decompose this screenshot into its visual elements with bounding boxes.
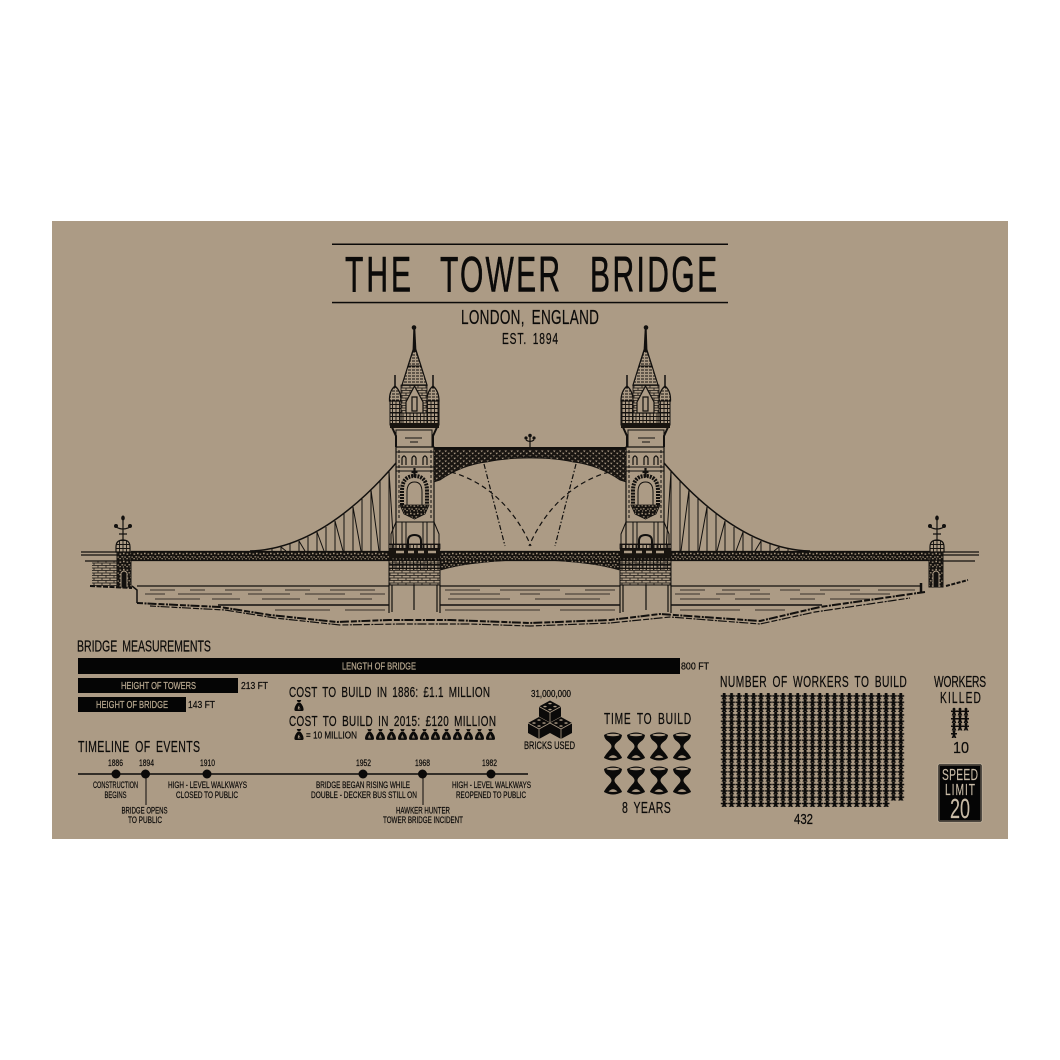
event 1968 — [383, 758, 463, 826]
bricks label: BRICKS USED — [524, 740, 575, 752]
bar: length of bridge: LENGTH OF BRIDGE — [342, 660, 416, 672]
pictogram: workers — [720, 693, 904, 807]
speed limit sign: LIMIT — [945, 781, 975, 799]
heading: WORKERS — [934, 673, 986, 691]
killed count: 10 — [953, 740, 969, 757]
event 1910: CLOSED TO PUBLIC — [176, 790, 238, 801]
workers count: 432 — [794, 811, 813, 828]
heading: NUMBER OF WORKERS TO BUILD — [720, 673, 907, 691]
panel: poster — [52, 221, 1008, 839]
title block: TOWER — [440, 247, 560, 302]
bar: length of bridge: 800 FT — [681, 660, 709, 672]
event 1952 — [311, 758, 417, 801]
title block — [332, 244, 728, 303]
icon: money bag — [294, 700, 304, 711]
speed limit sign: 20 — [950, 793, 970, 824]
speed limit sign — [938, 764, 982, 824]
legend: money bag equals 10 million: = 10 MILLION — [306, 730, 357, 742]
event 1910: HIGH - LEVEL WALKWAYS — [168, 780, 247, 791]
bar: length of bridge — [78, 658, 709, 674]
icons: twelve money bags — [365, 729, 495, 740]
event 1894: BRIDGE OPENS — [122, 806, 168, 816]
event 1968: HAWKER HUNTER — [396, 806, 450, 816]
event 1886 — [93, 758, 138, 801]
section: number of workers — [720, 673, 907, 828]
event 1894: TO PUBLIC — [128, 815, 162, 826]
section: time to build — [604, 710, 691, 817]
cost 1886: COST TO BUILD IN 1886: £1.1 MILLION — [289, 684, 490, 701]
event 1952: 1952 — [356, 758, 371, 769]
event 1910 — [168, 758, 247, 801]
title block: BRIDGE — [590, 247, 717, 302]
heading: KILLED — [940, 689, 981, 707]
bar: height of towers: HEIGHT OF TOWERS — [121, 680, 196, 692]
bar: height of towers: 213 FT — [241, 680, 268, 692]
event 1968: 1968 — [415, 758, 430, 769]
event 1982: 1982 — [482, 758, 497, 769]
speed limit sign: SPEED — [942, 766, 978, 784]
title block: THE — [345, 247, 411, 302]
brick count: 31,000,000 — [531, 689, 571, 700]
event 1894: 1894 — [139, 758, 154, 769]
heading — [934, 673, 986, 707]
event 1910: 1910 — [200, 758, 215, 769]
icons: eight hourglasses — [604, 732, 691, 794]
icon: stacked bricks — [528, 700, 572, 739]
section: bricks used — [524, 689, 575, 752]
central lamp — [524, 434, 536, 447]
event 1952: DOUBLE - DECKER BUS STILL ON — [311, 790, 417, 801]
timeline axis — [78, 770, 528, 805]
event 1982 — [452, 758, 531, 801]
right bank — [921, 580, 968, 593]
left abutment — [90, 561, 137, 603]
event 1982: REOPENED TO PUBLIC — [456, 790, 526, 801]
legend: money bag equals 10 million — [294, 729, 357, 742]
heading: BRIDGE MEASUREMENTS — [77, 637, 211, 655]
heading: TIMELINE OF EVENTS — [78, 738, 200, 756]
bar: height of bridge: 143 FT — [188, 699, 215, 711]
section: timeline of events — [78, 738, 531, 826]
cost 2015: COST TO BUILD IN 2015: £120 MILLION — [289, 713, 496, 730]
event 1968: TOWER BRIDGE INCIDENT — [383, 815, 463, 826]
heading: TIME TO BUILD — [604, 710, 691, 728]
bar: height of towers — [78, 678, 268, 693]
river bed — [137, 592, 925, 626]
section: cost to build — [289, 684, 496, 742]
bridge illustration — [81, 325, 979, 626]
event 1894 — [122, 758, 168, 826]
duration: 8 YEARS — [622, 799, 671, 817]
event 1886: BEGINS — [104, 790, 126, 801]
river — [137, 586, 921, 610]
event 1982: HIGH - LEVEL WALKWAYS — [452, 780, 531, 791]
event 1886: 1886 — [108, 758, 123, 769]
right half of bridge — [529, 325, 946, 613]
left half of bridge — [114, 325, 531, 613]
section: workers killed — [934, 673, 986, 757]
event 1952: BRIDGE BEGAN RISING WHILE — [316, 780, 410, 791]
bar: height of bridge: HEIGHT OF BRIDGE — [96, 699, 168, 711]
pictogram: ten workers — [951, 708, 969, 738]
event 1886: CONSTRUCTION — [93, 780, 138, 791]
established date: EST. 1894 — [502, 330, 558, 348]
deck — [81, 552, 979, 561]
section: bridge measurements — [77, 637, 709, 712]
subtitle: LONDON, ENGLAND — [461, 305, 599, 329]
bar: height of bridge — [78, 697, 215, 712]
